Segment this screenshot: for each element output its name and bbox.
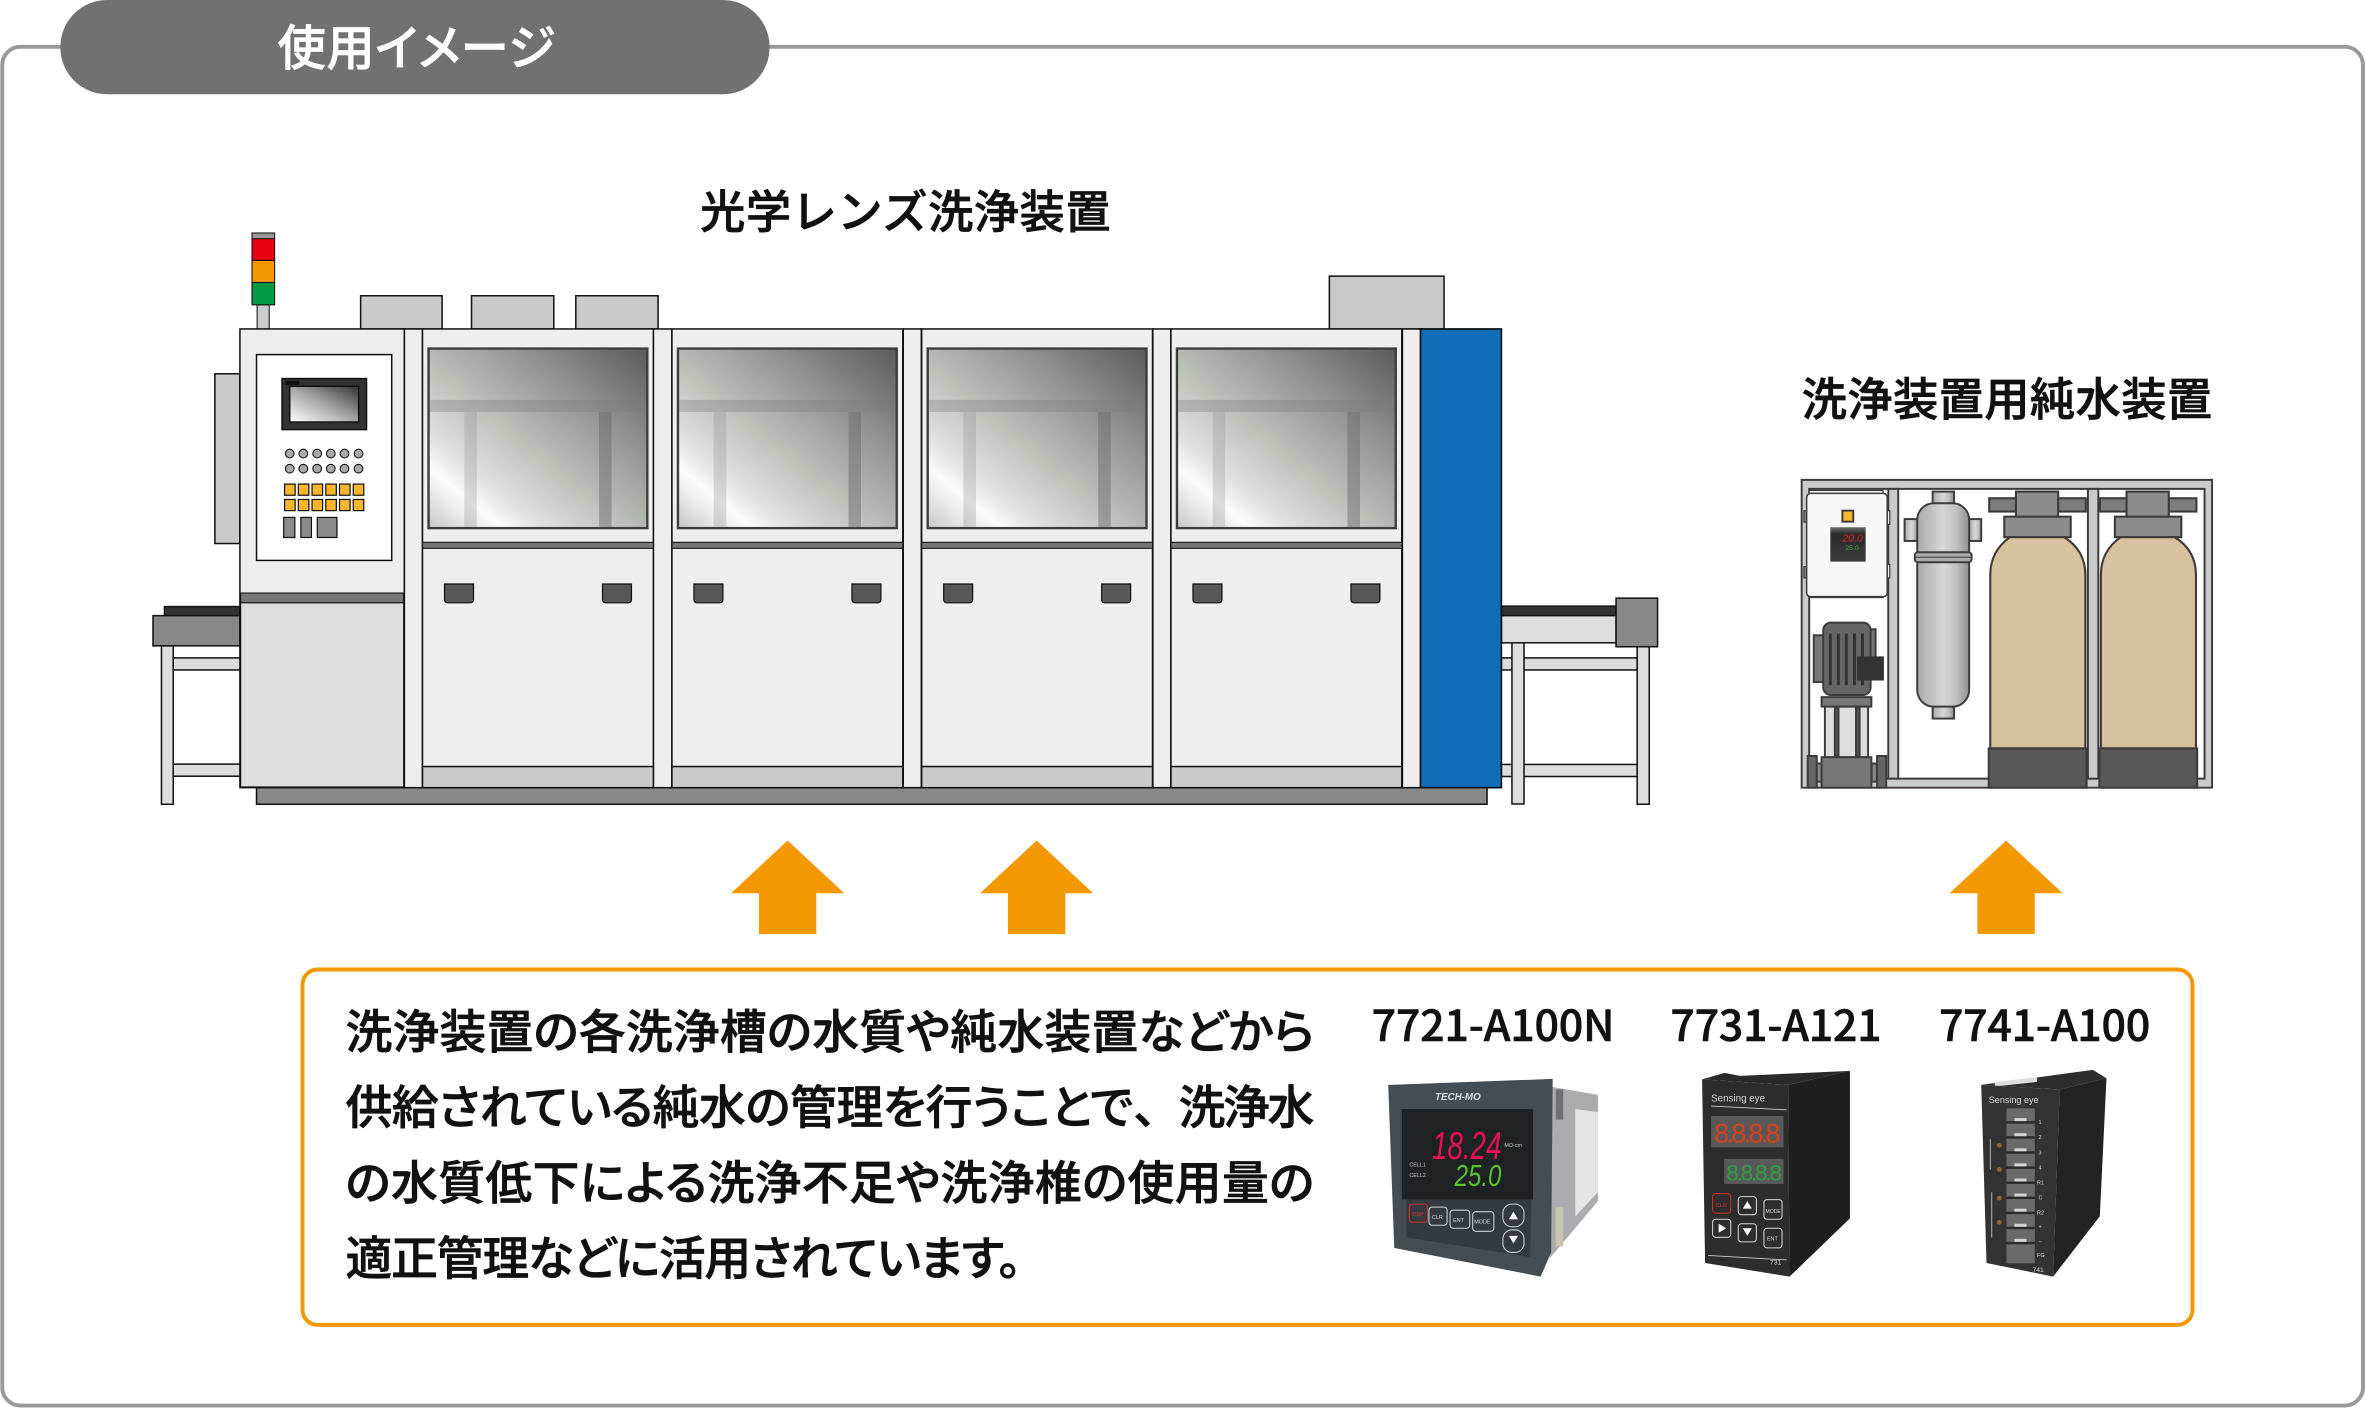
device photo 7731-A121: 731 — [1770, 1259, 1782, 1266]
device photo 7721-A100N: CELL1 — [1409, 1162, 1426, 1168]
device photo 7731-A121: 8.8.8.8 — [1726, 1161, 1782, 1186]
description text: 、 — [1133, 1071, 1180, 1138]
device photo 7731-A121: 8.8.8.8 — [1714, 1117, 1781, 1148]
device photo 7731-A121: MODE — [1765, 1209, 1781, 1215]
model label 7721-A100N: 7721-A100N — [1372, 992, 1615, 1054]
device photo 7721-A100N: CLR — [1432, 1215, 1443, 1221]
tank module 1 — [422, 329, 653, 788]
tank module 3 — [922, 329, 1153, 788]
arrow 1 — [731, 840, 844, 934]
device photo 7741-A100: R1 — [2037, 1181, 2044, 1187]
description text: 供給されている純水の管理を行うことで — [346, 1071, 1133, 1138]
machine base — [257, 788, 1487, 804]
device photo 7721-A100N: MΩ·cm — [1504, 1143, 1522, 1149]
heading: 洗浄装置用純水装置: 洗浄装置用純水装置 — [1802, 364, 2212, 430]
vertical posts — [404, 329, 1421, 788]
description text: 洗浄装置の各洗浄槽の水質や純水装置などから — [346, 996, 1314, 1063]
device photo 7731-A121: Sensing eye — [1711, 1094, 1766, 1105]
device photo 7741-A100: 741 — [2033, 1267, 2044, 1274]
device photo 7721-A100N: ENT — [1453, 1218, 1465, 1224]
arrow 2 — [980, 840, 1093, 934]
pump and motor — [1808, 623, 1886, 788]
right conveyor — [1501, 598, 1658, 804]
pure water system illustration — [1802, 480, 2212, 788]
tank module 2 — [672, 329, 903, 788]
device photo 7721-A100N: TECH-MO — [1435, 1092, 1481, 1103]
device photo 7731-A121: CLR — [1716, 1203, 1727, 1209]
left conveyor — [153, 607, 241, 804]
side panel — [215, 374, 240, 544]
device photo 7741-A100: C — [2039, 1196, 2043, 1202]
signal tower — [252, 233, 275, 329]
device photo 7731-A121: ENT — [1767, 1236, 1778, 1242]
device photo 7721-A100N: DSP — [1412, 1212, 1424, 1218]
resin tank 2 — [2099, 492, 2197, 788]
device photo 7741-A100: 2 — [2039, 1135, 2042, 1141]
device photo 7741-A100: R2 — [2037, 1211, 2044, 1217]
blue end cover — [1421, 329, 1501, 788]
device photo 7741-A100: − — [2039, 1239, 2042, 1245]
description text: 適正管理などに活用されています。 — [346, 1222, 1022, 1289]
control box with meter: 20.0 — [1841, 533, 1863, 545]
heading pill: 使用イメージ: 使用イメージ — [278, 9, 555, 79]
device photo 7741-A100: + — [2039, 1224, 2042, 1230]
tank module 4 — [1171, 329, 1402, 788]
heading: 光学レンズ洗浄装置: 光学レンズ洗浄装置 — [700, 176, 1111, 242]
filter vessel — [1905, 492, 1981, 719]
description text: 洗浄水 — [1178, 1071, 1314, 1138]
resin tank 1 — [1989, 492, 2087, 788]
description text — [346, 996, 1314, 1289]
device photo 7741-A100: Sensing eye — [1989, 1095, 2039, 1105]
device photo 7741-A100: 4 — [2039, 1165, 2042, 1171]
device photo 7741-A100 — [1981, 1070, 2106, 1277]
description panel — [303, 969, 2192, 1325]
device photo 7731-A121 — [1702, 1071, 1850, 1277]
lens cleaning machine illustration — [153, 233, 1658, 804]
frame — [1802, 480, 2212, 788]
device photo 7721-A100N — [1388, 1079, 1598, 1277]
top exhaust boxes — [361, 276, 1444, 329]
device photo 7741-A100: 1 — [2039, 1120, 2042, 1126]
model label 7741-A100: 7741-A100 — [1939, 992, 2150, 1054]
arrow 3 — [1950, 840, 2063, 934]
device photo 7741-A100: FG — [2037, 1253, 2045, 1259]
device photo 7721-A100N: 18.24 — [1432, 1124, 1501, 1168]
device photo 7721-A100N: 25.0 — [1454, 1160, 1502, 1193]
device photo 7721-A100N: CELL2 — [1409, 1173, 1426, 1179]
device photo 7721-A100N: MODE — [1474, 1220, 1491, 1226]
control box with meter — [1804, 490, 1890, 598]
device photo 7741-A100: 3 — [2039, 1150, 2042, 1156]
control panel — [257, 355, 392, 560]
control box with meter: 25.0 — [1845, 545, 1859, 552]
control cabinet — [240, 329, 404, 788]
heading pill: 使用イメージ — [60, 0, 770, 94]
model label 7731-A121: 7731-A121 — [1670, 992, 1882, 1054]
description text: の水質低下による洗浄不足や洗浄椎の使用量の — [346, 1147, 1314, 1214]
